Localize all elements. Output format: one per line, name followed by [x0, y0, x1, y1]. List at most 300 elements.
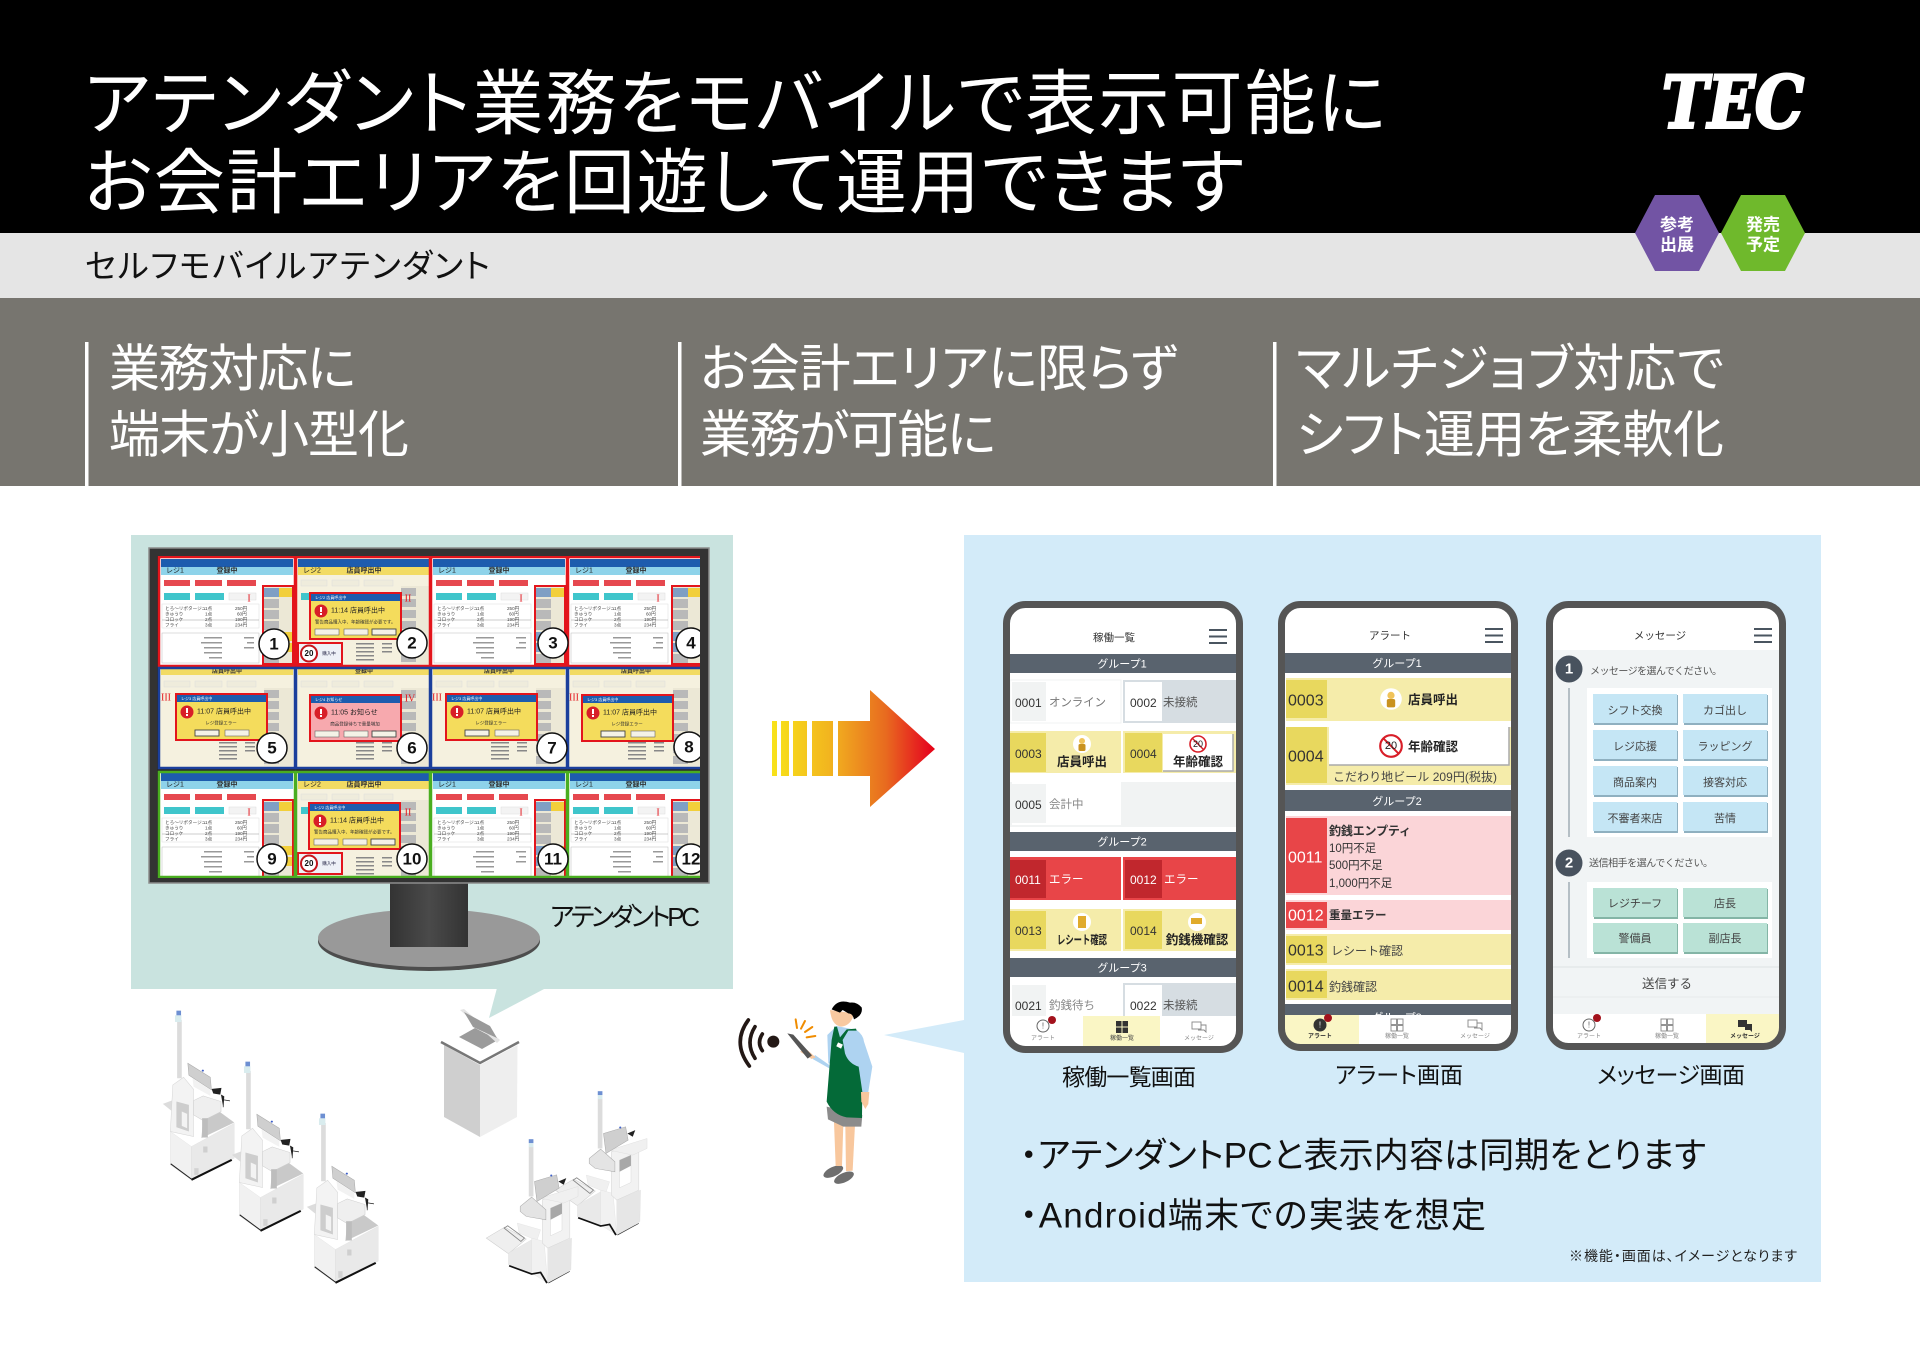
screen title: アラート [1369, 630, 1411, 642]
screen 9: 1点 [205, 825, 213, 831]
screen 1: 1点 [205, 606, 213, 612]
tile 0005: 会計中 [1049, 797, 1084, 811]
screen 2: 11:14 店員呼出中 [331, 606, 385, 614]
group 1 header: グループ1 [1097, 656, 1147, 670]
screen 4: 登録中 [626, 566, 646, 574]
tile 0004: 20 [1193, 739, 1203, 749]
screen 10: レジ2 [303, 782, 321, 788]
numbered markers [257, 628, 706, 874]
screen 11: 250円 [507, 820, 520, 826]
marker numbers: 7 [547, 738, 557, 758]
badge: reference exhibit: 参考 [1660, 216, 1694, 234]
screen 12: コロッケ [574, 830, 593, 836]
feature 2 [678, 340, 1178, 486]
badge: planned release: 発売 [1746, 214, 1780, 234]
screen 12: 60円 [646, 825, 656, 831]
row frames [159, 557, 702, 877]
screen 4 [568, 557, 704, 665]
screen 6 [296, 667, 432, 768]
row 0011: 釣銭エンプティ [1329, 823, 1411, 838]
row 0011: 0011 [1288, 850, 1323, 866]
tile 0002: 0002 [1130, 696, 1157, 710]
screen 11: レジ1 [438, 782, 456, 788]
tile 0001: オンライン [1049, 696, 1106, 709]
tab bar [1010, 1016, 1236, 1046]
tile 0002 [1123, 680, 1236, 723]
marker numbers: 2 [407, 634, 417, 652]
screen 9: 60円 [237, 825, 247, 831]
screen 10: 警告商品購入中、年齢確認が必要です。 [314, 828, 395, 836]
phone: alerts [1282, 604, 1514, 1048]
screen 4: 250円 [644, 606, 657, 612]
tile 0001 [1010, 680, 1121, 723]
marker numbers: 9 [267, 850, 277, 868]
screen 1: 190円 [235, 616, 248, 622]
badge: reference exhibit [1635, 195, 1719, 271]
screen 8 [568, 667, 704, 768]
tab bar: アラート [1308, 1033, 1332, 1040]
screen 10 [296, 771, 432, 879]
monitor [149, 548, 709, 883]
screen 12: 2点 [614, 830, 622, 836]
screen header: メッセージ [1634, 630, 1686, 642]
message options: カゴ出し [1703, 703, 1747, 717]
group 3 header: グループ3 [1372, 1010, 1422, 1024]
tile 0004: 0004 [1130, 747, 1157, 761]
screen 2: 警告商品購入中、年齢確認が必要です。 [315, 618, 396, 626]
screen 3: きゅうり [437, 610, 455, 617]
screen 12: 250円 [644, 820, 657, 826]
message options: レジ応援 [1613, 739, 1657, 753]
screen 11: 1点 [477, 820, 485, 826]
screen 9: 2点 [205, 830, 213, 836]
caption: messages: メッセージ画面 [1597, 1062, 1745, 1088]
screen 6: 商品登録待ちで重量増加 [330, 720, 380, 728]
screen 11: 190円 [507, 830, 520, 836]
screen 9: 234円 [235, 836, 248, 842]
row 0014 [1286, 969, 1511, 1000]
screen 12: 190円 [644, 830, 657, 836]
group 2 header [1285, 790, 1511, 811]
tile 0021: 釣銭待ち [1049, 998, 1095, 1012]
illustration: attendant with tablet [787, 1001, 872, 1186]
tile 0003 [1010, 731, 1121, 773]
screen 6: 11:05 お知らせ [331, 708, 378, 716]
screen 11: フライ [437, 836, 451, 842]
row 0014: 0014 [1288, 978, 1324, 996]
tile 0012: エラー [1164, 874, 1198, 886]
row 0012: 重量エラー [1329, 908, 1386, 922]
screen 9: 3点 [205, 836, 213, 842]
tab bar: メッセージ [1460, 1033, 1490, 1040]
screen 11: コロッケ [437, 830, 456, 836]
illustration: self checkout 2 [232, 1062, 303, 1231]
marker numbers: 8 [684, 738, 694, 756]
step 2 [1556, 850, 1713, 958]
tile 0005: 0005 [1015, 798, 1042, 812]
screen 3: 3点 [477, 622, 485, 628]
row 0012: 0012 [1288, 908, 1324, 924]
tab bar: ! [1319, 1020, 1321, 1030]
screen 8: レジ3 店員呼出中 [587, 696, 618, 702]
message options: シフト交換 [1608, 704, 1662, 717]
screen 3: 60円 [509, 611, 519, 617]
screen 1: フライ [165, 622, 179, 628]
tile 0002: 未接続 [1163, 695, 1198, 709]
recipient options: 警備員 [1618, 931, 1652, 945]
screen 4: I [656, 594, 660, 604]
tile 0022: 0022 [1130, 999, 1157, 1013]
screen 9: 1点 [205, 820, 213, 826]
screen 11: 3点 [477, 836, 485, 842]
recipient options: 店長 [1714, 897, 1736, 910]
screen 6: IV [405, 694, 416, 704]
row 0013: 0013 [1288, 942, 1324, 960]
phone: status list [1006, 604, 1240, 1050]
group 2 header [1010, 832, 1236, 851]
screen 4: 234円 [644, 622, 657, 628]
phone: messages [1550, 604, 1782, 1046]
tile 0022: 未接続 [1163, 998, 1198, 1012]
tile 0014: 釣銭機確認 [1166, 932, 1229, 947]
screen 11: 2点 [477, 830, 485, 836]
screen 4: コロッケ [574, 616, 593, 622]
screen 5: レジ登録エラー [205, 720, 237, 726]
screen 2: レジ2 店員呼出中 [315, 594, 346, 600]
bullet: sync: ・アテンダントPCと表示内容は同期をとります [1020, 1136, 1706, 1176]
tile 0012 [1123, 857, 1236, 900]
screen 1: きゅうり [165, 610, 183, 617]
feature 2: 業務が可能に [700, 406, 996, 464]
tab bar: メッセージ [1730, 1033, 1760, 1040]
marker numbers: 4 [686, 634, 696, 652]
send button: 送信する [1642, 976, 1692, 991]
tab bar: メッセージ [1184, 1035, 1214, 1042]
screen 4: とろ～リポタージュ [574, 604, 615, 612]
icon: menu [1485, 628, 1503, 643]
screen 3: 250円 [507, 606, 520, 612]
screen 7: レジ3 店員呼出中 [451, 695, 482, 701]
screen 3 [431, 557, 567, 665]
screen 11: I [519, 808, 523, 818]
screen 1: コロッケ [165, 616, 184, 622]
tab bar [1285, 1014, 1511, 1045]
screen 1: とろ～リポタージュ [165, 604, 206, 612]
row 0004: 20 [1385, 740, 1397, 752]
row 0003 [1286, 678, 1511, 721]
screen 12: きゅうり [574, 824, 592, 831]
feature 3: マルチジョブ対応で [1296, 340, 1724, 398]
screen 6: レジ4 お知らせ [315, 696, 342, 702]
tab bar: ! [1042, 1022, 1044, 1030]
marker numbers: 3 [548, 634, 558, 652]
tab bar: 稼働一覧 [1110, 1034, 1134, 1042]
screen 1 [159, 557, 295, 665]
step 1: メッセージを選んでください。 [1590, 664, 1722, 678]
screen 1: 1点 [205, 611, 213, 617]
screen 12: 3点 [614, 836, 622, 842]
group 1 header [1285, 653, 1511, 673]
screen 4: 3点 [614, 622, 622, 628]
tab bar: ! [1588, 1020, 1590, 1030]
screen 2: レジ2 [303, 568, 321, 574]
screen 6: 登録中 [355, 667, 373, 675]
group 3 header: グループ3 [1097, 960, 1147, 974]
panel: attendant PC [131, 535, 733, 1018]
tile 0004 [1123, 731, 1236, 773]
footnote: ※機能・画面は、イメージとなります [1569, 1248, 1797, 1264]
screen 9: 登録中 [216, 780, 238, 788]
screen 7: 11:07 店員呼出中 [467, 706, 521, 716]
feature 1: 端末が小型化 [109, 406, 409, 464]
arrow [772, 690, 935, 807]
screen 12: レジ1 [575, 782, 593, 788]
panel: mobile screens [884, 535, 1821, 1282]
tile 0014: 0014 [1130, 924, 1157, 938]
screen 1: 60円 [237, 611, 247, 617]
screen 10: 店員呼出中 [346, 780, 382, 788]
screen title: 稼働一覧 [1093, 631, 1135, 644]
screen 8: 11:07 店員呼出中 [603, 708, 657, 716]
feature 1 [85, 340, 409, 486]
badge: planned release [1721, 195, 1805, 271]
marker numbers: 6 [407, 738, 417, 758]
group 3 header [1010, 958, 1236, 977]
tile 0001: 0001 [1015, 696, 1042, 710]
monitor stand [318, 883, 540, 971]
tab bar [1553, 1014, 1779, 1044]
screen 3: とろ～リポタージュ [437, 604, 478, 612]
row 0013 [1286, 934, 1511, 965]
illustration: checkout pair rear [555, 1091, 647, 1235]
tile 0003: 0003 [1015, 747, 1042, 761]
screen 12: フライ [574, 836, 588, 842]
message options: 商品案内 [1613, 775, 1657, 789]
tab bar: アラート [1577, 1033, 1601, 1040]
feature band [0, 298, 1920, 486]
screen 3: 1点 [477, 606, 485, 612]
badge: reference exhibit: 出展 [1660, 236, 1694, 254]
row 0011 [1286, 816, 1511, 895]
screen 3: 1点 [477, 611, 485, 617]
tile 0012: 0012 [1130, 873, 1157, 887]
screen 3: レジ1 [438, 568, 456, 574]
screen 9: I [247, 808, 251, 818]
row 0014: 釣銭確認 [1329, 979, 1377, 994]
screen 4: 1点 [614, 606, 622, 612]
screen 1: 登録中 [216, 566, 238, 574]
message options: 不審者来店 [1608, 812, 1662, 825]
row 0011: 10円不足 [1329, 843, 1377, 855]
screen 4: フライ [574, 622, 588, 628]
illustration: podium with tablet [441, 1009, 519, 1137]
tile 0011: エラー [1049, 874, 1084, 886]
group 3 header [1285, 1004, 1511, 1024]
recipient options: レジチーフ [1608, 897, 1662, 910]
tile 0021: 0021 [1015, 999, 1042, 1013]
group 1 header: グループ1 [1372, 656, 1422, 670]
subtitle: セルフモバイルアテンダント [85, 248, 490, 284]
feature 1: 業務対応に [109, 340, 356, 398]
tile 0013: 0013 [1015, 924, 1042, 938]
step 1: 1 [1565, 660, 1573, 678]
screen 10: 11:14 店員呼出中 [330, 816, 384, 824]
row 0004 [1286, 727, 1511, 785]
screen 11: 登録中 [488, 780, 510, 788]
feature 3: シフト運用を柔軟化 [1296, 406, 1724, 464]
screen 3: 234円 [507, 622, 520, 628]
screen 9: レジ1 [166, 782, 184, 788]
screen 2: II [405, 594, 411, 604]
screen 5 [159, 667, 295, 768]
tile 0003: 店員呼出 [1057, 755, 1107, 769]
screen 12: 234円 [644, 836, 657, 842]
screen 7 [431, 667, 567, 768]
message options: 接客対応 [1703, 775, 1747, 789]
screen 4: きゅうり [574, 610, 592, 617]
bullet: android: ・Android端末での実装を想定 [1020, 1196, 1486, 1236]
screen 4: 1点 [614, 611, 622, 617]
screen 11: 1点 [477, 825, 485, 831]
recipient options [1587, 882, 1772, 958]
screen 12: 登録中 [626, 780, 646, 788]
screen 1: I [247, 594, 251, 604]
step 2: 2 [1565, 854, 1573, 872]
screen 12: I [656, 808, 660, 818]
screen 12: 1点 [614, 825, 622, 831]
screen 2: 店員呼出中 [346, 566, 382, 574]
message options: ラッピング [1698, 739, 1752, 753]
marker numbers: 10 [403, 850, 421, 868]
screen 5: 店員呼出中 [212, 667, 242, 675]
tab bar: 稼働一覧 [1655, 1032, 1679, 1040]
marker numbers: 12 [682, 850, 700, 868]
screen 9: 190円 [235, 830, 248, 836]
screen 11 [431, 771, 567, 879]
row 0003: 店員呼出 [1408, 693, 1458, 707]
row 0013: レシート確認 [1331, 943, 1403, 958]
tile 0013: レシート確認 [1057, 932, 1107, 947]
screen 3: I [519, 594, 523, 604]
header band [0, 0, 1920, 233]
screen 9: フライ [165, 836, 179, 842]
screen 5: III [161, 692, 171, 704]
screen 12 [568, 771, 704, 879]
screen 4: 2点 [614, 616, 622, 622]
row 0011: 1,000円不足 [1329, 878, 1393, 890]
icon: wireless signal [740, 1020, 779, 1066]
tile 0021 [1012, 985, 1094, 1016]
screen 2: 購入中 [322, 650, 336, 657]
badge: planned release: 予定 [1746, 236, 1780, 254]
screen 1: 3点 [205, 622, 213, 628]
screen 11: 60円 [509, 825, 519, 831]
screen 4: 190円 [644, 616, 657, 622]
screen 3: 2点 [477, 616, 485, 622]
illustration: self checkout 3 [307, 1114, 378, 1283]
marker numbers: 5 [267, 738, 277, 758]
screen 9 [159, 771, 295, 879]
screen 3: 登録中 [488, 566, 510, 574]
marker numbers [267, 634, 700, 868]
tile 0022 [1123, 983, 1236, 1016]
screen 3: フライ [437, 622, 451, 628]
group 1 header [1010, 654, 1236, 673]
label: attendant PC: アテンダントPC [550, 902, 700, 932]
marker numbers: 1 [269, 634, 279, 654]
step 2: 送信相手を選んでください。 [1589, 856, 1713, 870]
icon: menu [1209, 629, 1227, 644]
screen 5: レジ3 店員呼出中 [181, 695, 212, 701]
row 0011: 500円不足 [1329, 860, 1383, 872]
caption: alerts: アラート画面 [1335, 1062, 1463, 1088]
marker numbers: 11 [544, 850, 562, 868]
group 2 header: グループ2 [1372, 794, 1422, 808]
screen 11: 234円 [507, 836, 520, 842]
row 0004: こだわり地ビール 209円(税抜) [1333, 770, 1497, 784]
feature 2: お会計エリアに限らず [700, 340, 1178, 398]
illustration: checkout pair front [486, 1139, 578, 1283]
screen 2: 20 [305, 649, 314, 658]
screen 9: 250円 [235, 820, 248, 826]
title: アテンダント業務をモバイルで表示可能に [84, 66, 1386, 144]
screen 3: コロッケ [437, 616, 456, 622]
screen 1: 234円 [235, 622, 248, 628]
screen 8: III [569, 692, 579, 704]
screen 8: 店員呼出中 [621, 667, 651, 675]
title [84, 66, 1386, 224]
row 0004: 年齢確認 [1408, 739, 1459, 754]
screen 11: きゅうり [437, 824, 455, 831]
screen header [1553, 608, 1779, 650]
subtitle band [0, 233, 1920, 298]
TEC logo: TEC [1662, 60, 1804, 144]
group 2 header: グループ2 [1097, 834, 1147, 848]
screen 1: 250円 [235, 606, 248, 612]
tile 0011: 0011 [1015, 873, 1041, 887]
screen 12: とろ～リポタージュ [574, 818, 615, 826]
caption: status list: 稼働一覧画面 [1062, 1064, 1196, 1090]
step 1 [1556, 656, 1722, 837]
screen 8: レジ登録エラー [611, 720, 643, 728]
screen 1: 2点 [205, 616, 213, 622]
screen 10: 20 [305, 859, 314, 868]
screen 7: III [432, 692, 442, 704]
tab bar: 稼働一覧 [1385, 1032, 1409, 1040]
screen 10: 購入中 [322, 860, 336, 867]
title: お会計エリアを回遊して運用できます [84, 144, 1244, 224]
message options: 苦情 [1714, 812, 1736, 825]
feature 3 [1273, 340, 1724, 486]
tile 0014 [1123, 909, 1236, 951]
tile 0013 [1010, 909, 1121, 951]
tile 0004: 年齢確認 [1173, 754, 1223, 769]
screen 9: きゅうり [165, 824, 183, 831]
recipient options: 副店長 [1708, 932, 1742, 945]
illustration: self checkout 1 [163, 1011, 234, 1180]
screen 1: レジ1 [166, 568, 184, 574]
row 0004: 0004 [1288, 748, 1324, 766]
row 0003: 0003 [1288, 692, 1324, 710]
screen 3: 190円 [507, 616, 520, 622]
screen 10: レジ2 店員呼出中 [314, 804, 345, 810]
screen 9: とろ～リポタージュ [165, 818, 206, 826]
screen 4: 60円 [646, 611, 656, 617]
tab bar: アラート [1031, 1035, 1055, 1042]
screen 5: 11:07 店員呼出中 [197, 706, 251, 716]
screen 7: レジ登録エラー [475, 720, 507, 726]
row 0012 [1286, 900, 1511, 930]
